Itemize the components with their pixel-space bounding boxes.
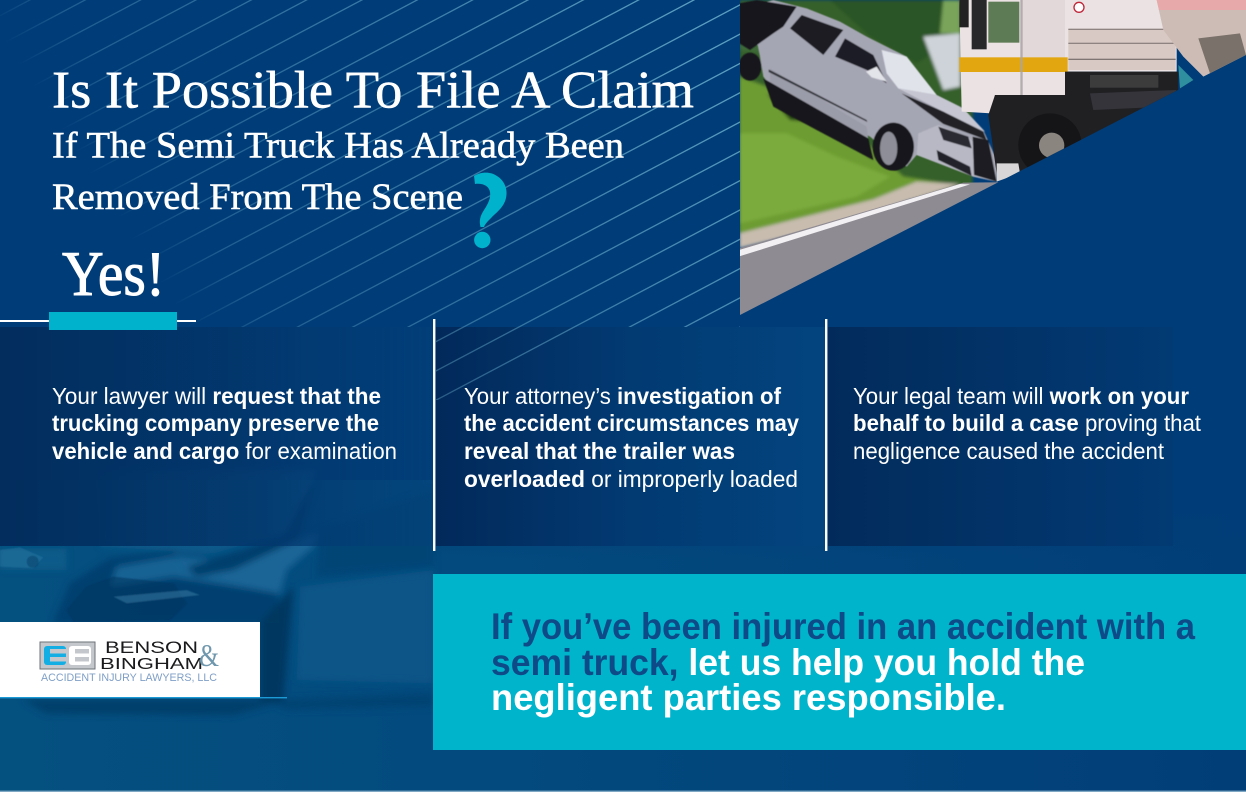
logo icon: BB monogram: [40, 642, 95, 669]
panel: step two background: [436, 327, 826, 546]
text block: step two: [464, 383, 799, 492]
text block: step three: Your legal team will work on your: [853, 383, 1189, 409]
text block: step three: behalf to build a case proving that: [853, 410, 1202, 436]
photo: silver car: [739, 0, 997, 182]
icon: cyan question mark: [474, 173, 507, 248]
answer: Yes: Yes!: [62, 239, 165, 309]
photo: foliage and grass backdrop: [739, 0, 973, 248]
title line three: Removed From The Scene: [52, 177, 463, 218]
title line two: If The Semi Truck Has Already Been: [52, 126, 624, 166]
text block: step one: [52, 383, 397, 464]
divider right: [825, 319, 827, 551]
callout text line two: semi truck, let us help you hold the: [491, 642, 1085, 683]
logo tagline: ACCIDENT INJURY LAWYERS, LLC: [41, 672, 217, 684]
text block: step three: negligence caused the accident: [853, 438, 1165, 464]
text block: step two: reveal that the trailer was: [464, 438, 735, 464]
divider left: [433, 319, 435, 551]
callout panel: [433, 574, 1246, 750]
photo: white semi truck cab: [959, 0, 1246, 113]
photo: road: [740, 182, 998, 315]
callout text line three: negligent parties responsible.: [491, 677, 1006, 718]
text block: step three: [853, 383, 1202, 464]
photo: truck chassis and wheel: [988, 72, 1178, 182]
text block: step two: the accident circumstances may: [464, 410, 799, 436]
text block: step one: vehicle and cargo for examination: [52, 438, 397, 464]
text block: step two: Your attorney’s investigation of: [464, 383, 781, 409]
panel: step one background: [0, 327, 434, 546]
logo name: Bingham: BINGHAM: [100, 656, 203, 673]
panel: step three background: [828, 327, 1173, 546]
text block: step one: trucking company preserve the: [52, 410, 379, 436]
underline accent: [0, 312, 196, 330]
background photo: wrecked car, blue tint: [0, 470, 1246, 792]
text block: step two: overloaded or improperly loaded: [464, 466, 798, 492]
logo card: [0, 622, 287, 698]
photo: car and semi truck collision: [739, 0, 1246, 320]
callout text line one: If you’ve been injured in an accident with a: [491, 606, 1195, 647]
logo ampersand: &: [199, 637, 219, 673]
title line one: Is It Possible To File A Claim: [52, 62, 694, 120]
title: [52, 62, 694, 218]
logo name: Benson: BENSON: [105, 639, 198, 657]
text block: step one: Your lawyer will request that the: [52, 383, 381, 409]
